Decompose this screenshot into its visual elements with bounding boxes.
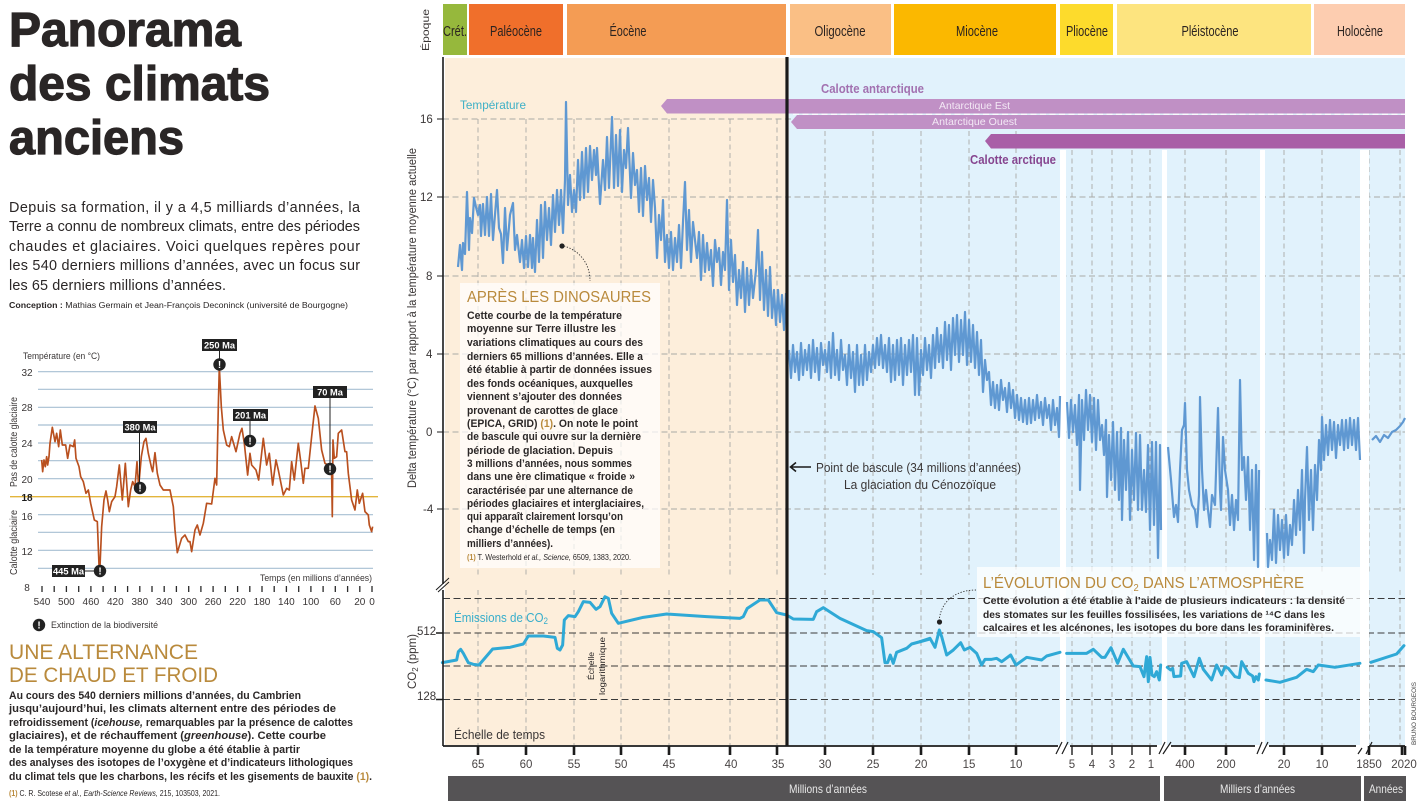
intro text: les 65 derniers millions d’années. xyxy=(9,278,226,294)
text block: alternance: jusqu’aujourd’hui, les climats alternent entre des périodes de xyxy=(8,703,336,715)
time axis: 30 xyxy=(819,759,831,771)
epoch: Pléistocène: Pléistocène xyxy=(1182,23,1238,40)
heading: une alternance: UNE ALTERNANCE xyxy=(9,641,198,664)
x axis: 180 xyxy=(254,597,271,608)
x axis: 0 xyxy=(369,597,375,608)
callout body: périodes glaciaires et interglaciaires, xyxy=(467,498,644,510)
scale bar: années xyxy=(1364,776,1406,801)
epoch: Oligocène xyxy=(790,4,891,55)
callout body: moyenne sur Terre illustre les xyxy=(467,323,616,335)
x axis: 100 xyxy=(303,597,320,608)
intro text xyxy=(9,200,360,294)
text block: alternance: Au cours des 540 derniers millions d’années, du Cambrien xyxy=(9,690,301,702)
text block: alternance: glaciaires), et de réchauffement ( greenhouse ). Cette courbe xyxy=(9,730,326,742)
time axis: 2020 xyxy=(1391,759,1417,771)
epoch band xyxy=(443,4,1405,55)
marker 250 Ma xyxy=(202,339,237,371)
callout body xyxy=(983,596,1345,634)
epoch: Pliocène xyxy=(1060,4,1113,55)
tipping line xyxy=(785,57,789,746)
grid xyxy=(443,119,1405,745)
callout body: (EPICA, GRID) (1). On note le point xyxy=(467,418,638,430)
x axis: 500 xyxy=(58,597,75,608)
callout pointer xyxy=(559,243,590,281)
marker 201 Ma xyxy=(233,409,268,448)
marker 250 Ma: ! xyxy=(218,360,221,371)
y axis labels: 12 xyxy=(21,547,33,558)
y axis: CO2: 2 xyxy=(411,667,420,672)
marker 250 Ma: 250 Ma xyxy=(204,340,236,350)
time axis: 2 xyxy=(1129,759,1135,771)
bar: calotte arctique xyxy=(985,134,1405,148)
axis break mark xyxy=(436,578,449,592)
y axis labels xyxy=(9,351,100,594)
marker 380 Ma: 380 Ma xyxy=(124,422,156,432)
scale bar: milliers d'années: Milliers d’années xyxy=(1220,782,1295,796)
epoch: Éocène: Éocène xyxy=(610,23,646,40)
time axis: 1850 xyxy=(1356,759,1382,771)
label: émissions de CO2: 2 xyxy=(544,616,548,626)
time axis: 4 xyxy=(1089,759,1096,771)
callout pointer xyxy=(937,590,976,625)
y axis: CO2: (ppm) xyxy=(407,634,419,667)
time axis: 5 xyxy=(1069,759,1075,771)
intro text: chaudes et glaciaires. Voici quelques repères pour xyxy=(9,239,360,255)
intro text: Terre a connu de nombreux climats, entre des périodes xyxy=(9,219,360,235)
main chart xyxy=(436,57,1405,746)
time axis xyxy=(443,742,1417,801)
marker 380 Ma: ! xyxy=(138,484,142,494)
callout body: qui apparaît clairement lorsqu’on xyxy=(467,511,623,523)
callout: évolution du CO2 xyxy=(937,573,1345,634)
time axis: 10 xyxy=(1316,759,1328,771)
epoch: Miocène xyxy=(894,4,1056,55)
time axis: 55 xyxy=(568,759,580,771)
annotation: point de bascule: La glaciation du Cénozoïque xyxy=(844,478,996,492)
scale bar: millions d'années xyxy=(448,776,1160,801)
callout body: période de glaciation. Depuis xyxy=(467,445,613,457)
callout body: dans une ère climatique « froide » xyxy=(467,471,635,483)
x axis: 420 xyxy=(107,597,124,608)
left axis xyxy=(442,57,444,746)
temperature curve xyxy=(458,102,1405,567)
epoch: Pléistocène xyxy=(1117,4,1311,55)
time axis: 200 xyxy=(1216,759,1236,771)
x axis: 260 xyxy=(205,597,222,608)
x axis: Temps (en millions d’années) xyxy=(260,573,372,583)
epoch: Oligocène: Oligocène xyxy=(814,23,866,40)
epoch: Crétacé xyxy=(443,4,467,55)
credit: illustrator: BRUNO BOURGEOIS xyxy=(1411,682,1418,745)
callout body: (1) T. Westerhold et al., Science, 6509, 1383, 2020. xyxy=(467,552,631,562)
callout body: Cette évolution a été établie à l’aide de plusieurs indicateurs : la densité xyxy=(983,596,1345,607)
annotation: point de bascule xyxy=(790,461,1021,492)
time axis: 40 xyxy=(725,759,737,771)
epoch: Éocène xyxy=(567,4,786,55)
time axis: 45 xyxy=(663,759,675,771)
callout heading: 2 xyxy=(1133,583,1139,594)
callout heading: APRÈS LES DINOSAURES xyxy=(467,289,651,306)
callout body: Cette courbe de la température xyxy=(467,310,622,322)
callout body: provenant de carottes de glace xyxy=(467,405,618,417)
callout heading: L’ÉVOLUTION DU CO xyxy=(983,575,1143,592)
y axis: temperature: 12 xyxy=(420,192,433,204)
x axis: 380 xyxy=(131,597,149,608)
heading: une alternance xyxy=(9,641,218,687)
annotation: point de bascule: Point de bascule (34 millions d’années) xyxy=(816,461,1021,475)
epoch: Paléocène: Paléocène xyxy=(490,23,542,40)
callout body: change d’échelle de temps (en xyxy=(467,524,615,536)
legend: extinction: ! xyxy=(37,620,41,632)
callout body: de bascule qui ouvre sur la dernière xyxy=(467,431,641,443)
text block: alternance: (1) C. R. Scotese et al., Earth-Science Reviews, 215, 103503, 2021. xyxy=(9,788,220,798)
time axis: 400 xyxy=(1175,759,1195,771)
callout body: derniers 65 millions d’années. Elle a xyxy=(467,351,643,363)
label: échelle logarithmique: Échelle xyxy=(586,652,596,680)
y axis labels: 8 xyxy=(24,583,30,594)
marker 380 Ma xyxy=(123,421,157,494)
time axis: 60 xyxy=(520,759,532,771)
callout body: 3 millions d’années, nous sommes xyxy=(467,458,632,470)
time axis: 35 xyxy=(772,759,784,771)
callout body: caractérisée par une alternance de xyxy=(467,485,633,497)
x axis: 300 xyxy=(180,597,197,608)
y axis labels: 24 xyxy=(21,439,33,450)
intro text: les 540 derniers millions d’années, avec un focus sur xyxy=(9,258,360,274)
label: échelle logarithmique: logarithmique xyxy=(597,637,607,695)
marker 201 Ma: ! xyxy=(248,436,252,448)
time axis: 3 xyxy=(1109,759,1115,771)
y axis labels: Calotte glaciaire xyxy=(9,510,20,575)
marker 201 Ma: 201 Ma xyxy=(235,410,267,420)
text block: alternance: refroidissement (icehouse, remarquables par la présence de calottes xyxy=(9,717,353,729)
y axis: CO2: CO xyxy=(407,672,419,689)
x axis: 340 xyxy=(156,597,173,608)
epoch: Paléocène xyxy=(469,4,563,55)
y axis labels: 32 xyxy=(21,368,33,379)
text block: alternance: des analyses des isotopes de l’oxygène et d’indicateurs lithologiques xyxy=(9,757,353,769)
y axis: temperature: 8 xyxy=(426,271,432,283)
label: échelle de temps: Échelle de temps xyxy=(454,727,545,742)
label: température: Température xyxy=(460,98,526,112)
callout body: calcaires et les alcénones, les isotopes du bore dans les foraminifères. xyxy=(983,623,1334,634)
y axis labels: 28 xyxy=(21,403,33,414)
epoch: Pliocène: Pliocène xyxy=(1066,23,1108,40)
callout: après les dinosaures xyxy=(467,243,652,562)
time axis: 65 xyxy=(472,759,484,771)
bar: Antarctique Est xyxy=(661,99,1405,114)
label: calotte antarctique: Calotte antarctique xyxy=(821,82,924,96)
axis break slashes xyxy=(1056,742,1372,754)
label: échelle logarithmique xyxy=(586,637,607,695)
time axis: 1 xyxy=(1148,759,1154,771)
epoch: Holocène: Holocène xyxy=(1337,23,1383,40)
callout body: milliers d’années). xyxy=(467,538,553,550)
chart: 540 million year temperature xyxy=(9,339,378,632)
marker 70 Ma xyxy=(313,386,347,476)
callout body xyxy=(467,310,652,562)
y axis labels: 20 xyxy=(21,475,33,486)
x axis: 460 xyxy=(83,597,100,608)
marker 445 Ma: 445 Ma xyxy=(53,566,85,576)
intro text: Depuis sa formation, il y a 4,5 milliards d’années, la xyxy=(9,200,360,216)
CO2 curve xyxy=(442,597,1404,682)
marker 70 Ma: 70 Ma xyxy=(317,388,344,398)
title: anciens xyxy=(9,112,184,165)
callout body: été établie à partir de données issues xyxy=(467,364,652,376)
credits: Conception : Mathias Germain et Jean-François Deconinck (université de Bourgogne) xyxy=(9,301,348,310)
callout body: viennent s’ajouter des données xyxy=(467,391,622,403)
callout panel background: après les dinosaures xyxy=(460,283,660,568)
x axis: 60 xyxy=(330,597,341,608)
label: époque: Époque xyxy=(419,9,432,51)
title: Panorama xyxy=(9,4,241,57)
y axis: temperature: 0 xyxy=(426,427,432,439)
y axis labels: Pas de calotte glaciaire xyxy=(9,397,20,487)
y axis: temperature: 4 xyxy=(426,349,433,361)
time axis: 20 xyxy=(1278,759,1290,771)
y axis labels: 18 xyxy=(21,493,33,504)
scale bar: milliers d'années xyxy=(1164,776,1361,801)
y axis labels: Température (en °C) xyxy=(23,351,100,361)
time axis: 20 xyxy=(915,759,927,771)
y axis: CO2: 512 xyxy=(417,626,436,638)
text block: alternance xyxy=(8,690,372,798)
bar: Antarctique Est: Antarctique Est xyxy=(939,100,1010,112)
scale bar: millions d'années: Millions d’années xyxy=(789,782,867,796)
time axis: 50 xyxy=(615,759,627,771)
marker 70 Ma: ! xyxy=(328,464,332,476)
y axis labels: 16 xyxy=(21,512,33,523)
text block: alternance: de la température moyenne du globe a été établie à partir xyxy=(9,744,300,756)
time-scale breaks xyxy=(1060,150,1369,745)
callout body: des stomates sur les feuilles fossilisées, les variations de ¹⁴C dans les xyxy=(983,610,1325,621)
x axis: 220 xyxy=(229,597,246,608)
ice sheet bars xyxy=(661,82,1405,167)
x axis xyxy=(34,573,375,608)
time axis: 15 xyxy=(963,759,975,771)
heading: une alternance: DE CHAUD ET FROID xyxy=(9,664,218,687)
marker 445 Ma xyxy=(52,565,106,578)
text block: alternance: du climat tels que les charbons, les récifs et les gisements de bauxite (1). xyxy=(9,771,372,783)
callout body: variations climatiques au cours des xyxy=(467,337,643,349)
epoch: Holocène xyxy=(1314,4,1405,55)
temperature curve xyxy=(42,367,373,567)
y axis: CO2: 128 xyxy=(417,691,436,703)
x axis: 20 xyxy=(354,597,366,608)
y axis: temperature: -4 xyxy=(423,504,434,516)
bar: Antarctique Ouest: Antarctique Ouest xyxy=(932,116,1017,128)
callout heading: DANS L’ATMOSPHÈRE xyxy=(1139,573,1304,592)
label: calotte arctique: Calotte arctique xyxy=(970,153,1056,167)
scale bar: années: Années xyxy=(1369,782,1403,796)
y axis: temperature: Delta température (°C) par rapport à la température moyenne actuelle xyxy=(407,148,419,488)
x axis: 540 xyxy=(34,597,51,608)
bar: Antarctique Ouest xyxy=(791,115,1405,129)
epoch: Crétacé: Crét. xyxy=(443,23,467,40)
callout body: des fonds océaniques, auxquelles xyxy=(467,378,633,390)
time axis: 10 xyxy=(1010,759,1022,771)
y axis: temperature xyxy=(407,114,443,516)
callout: CO2 panel background xyxy=(977,567,1360,637)
time axis: 25 xyxy=(867,759,879,771)
title: des climats xyxy=(9,58,270,111)
epoch: Miocène: Miocène xyxy=(956,23,998,40)
label: émissions de CO2: Émissions de CO xyxy=(454,610,554,625)
legend: extinction: Extinction de la biodiversité xyxy=(51,620,158,630)
marker 445 Ma: ! xyxy=(98,566,102,578)
legend: extinction xyxy=(33,619,158,632)
y axis: temperature: 16 xyxy=(420,114,433,126)
title xyxy=(9,4,270,165)
x axis: 140 xyxy=(278,597,295,608)
y axis: CO2 xyxy=(407,626,443,703)
